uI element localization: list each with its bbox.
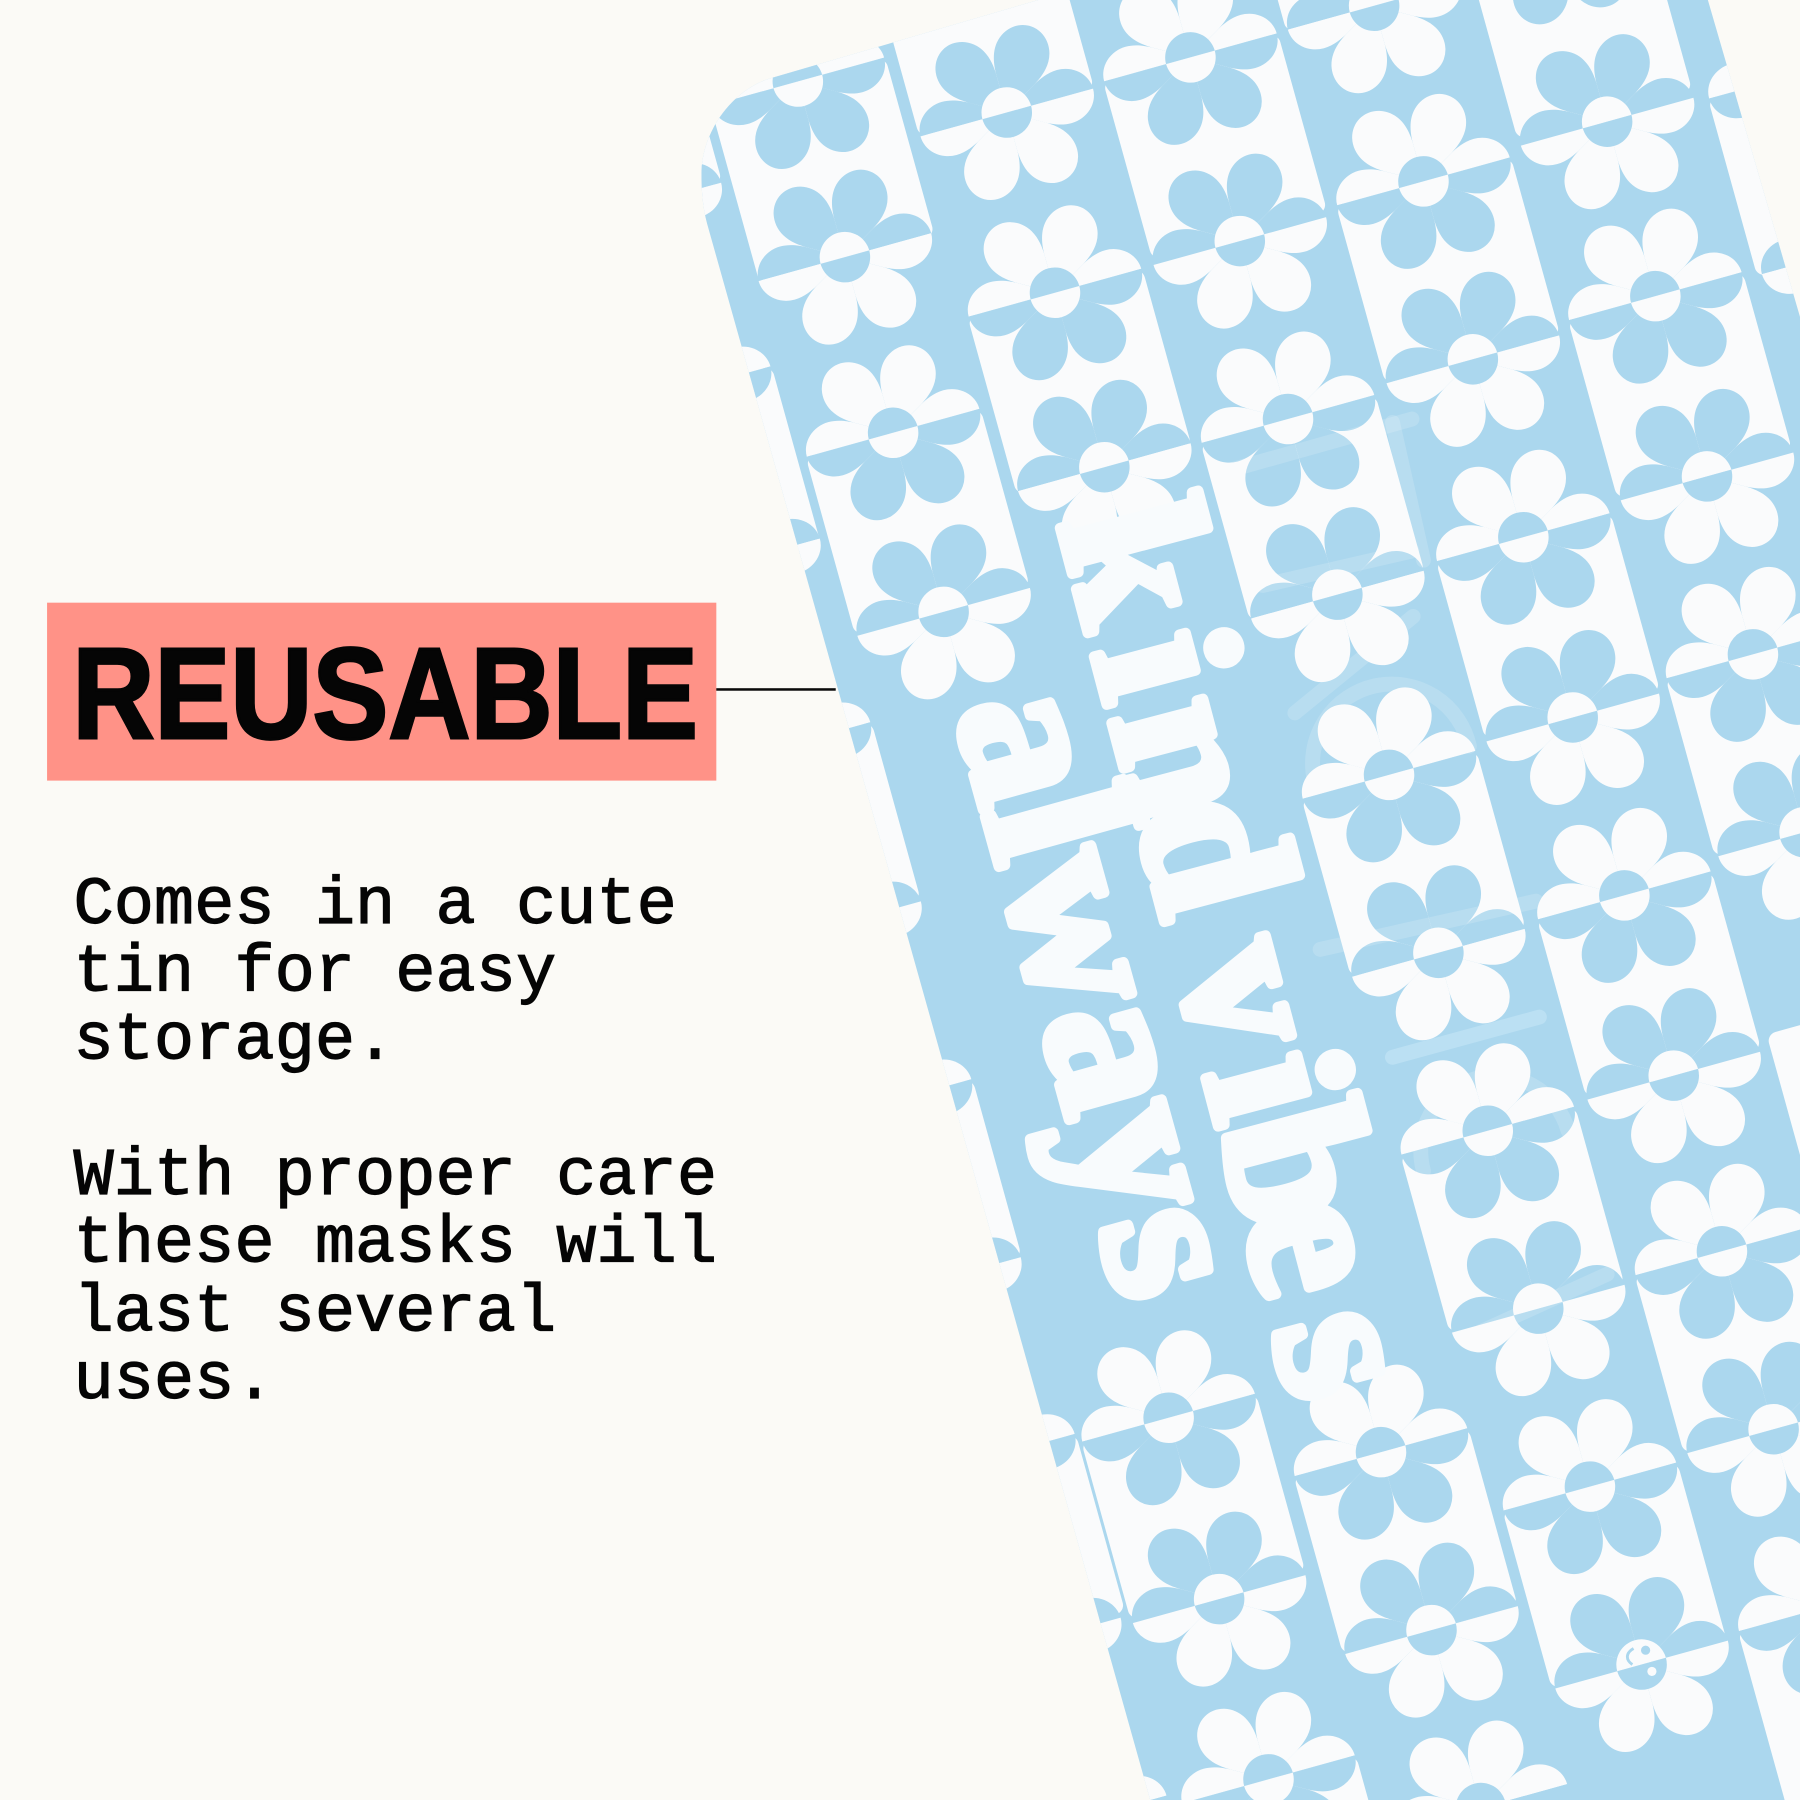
- heading background: [47, 603, 716, 781]
- body text: storage paragraph: [73, 868, 677, 1079]
- icon: small brand face in flower centre: [1627, 1646, 1657, 1676]
- sheet slogan text: kind vibes: [1015, 475, 1470, 1418]
- flowers: blue-over-white: [524, 0, 1800, 1776]
- sheet slogan text: always: [912, 660, 1298, 1319]
- body text: storage paragraph: Comes in a cute: [73, 868, 677, 944]
- flowers: white-over-blue: [573, 0, 1800, 1800]
- connector line from heading to sheet: [715, 688, 836, 691]
- body text: care paragraph: these masks will: [73, 1207, 717, 1283]
- body text: care paragraph: uses.: [73, 1343, 275, 1419]
- panel: patterned sheet mask: [702, 0, 1800, 1800]
- embossed translucent watermark: [1228, 419, 1607, 1332]
- heading tag: REUSABLE: [47, 603, 716, 781]
- body text: care paragraph: [73, 1139, 717, 1419]
- body text: storage paragraph: storage.: [73, 1003, 395, 1079]
- sheet base colour: [689, 0, 1800, 1800]
- body text: care paragraph: With proper care: [73, 1139, 717, 1215]
- heading text: REUSABLE: [72, 622, 698, 766]
- body text: care paragraph: last several: [73, 1275, 556, 1351]
- body text: storage paragraph: tin for easy: [73, 936, 556, 1012]
- white checker tiles: [498, 0, 1800, 1800]
